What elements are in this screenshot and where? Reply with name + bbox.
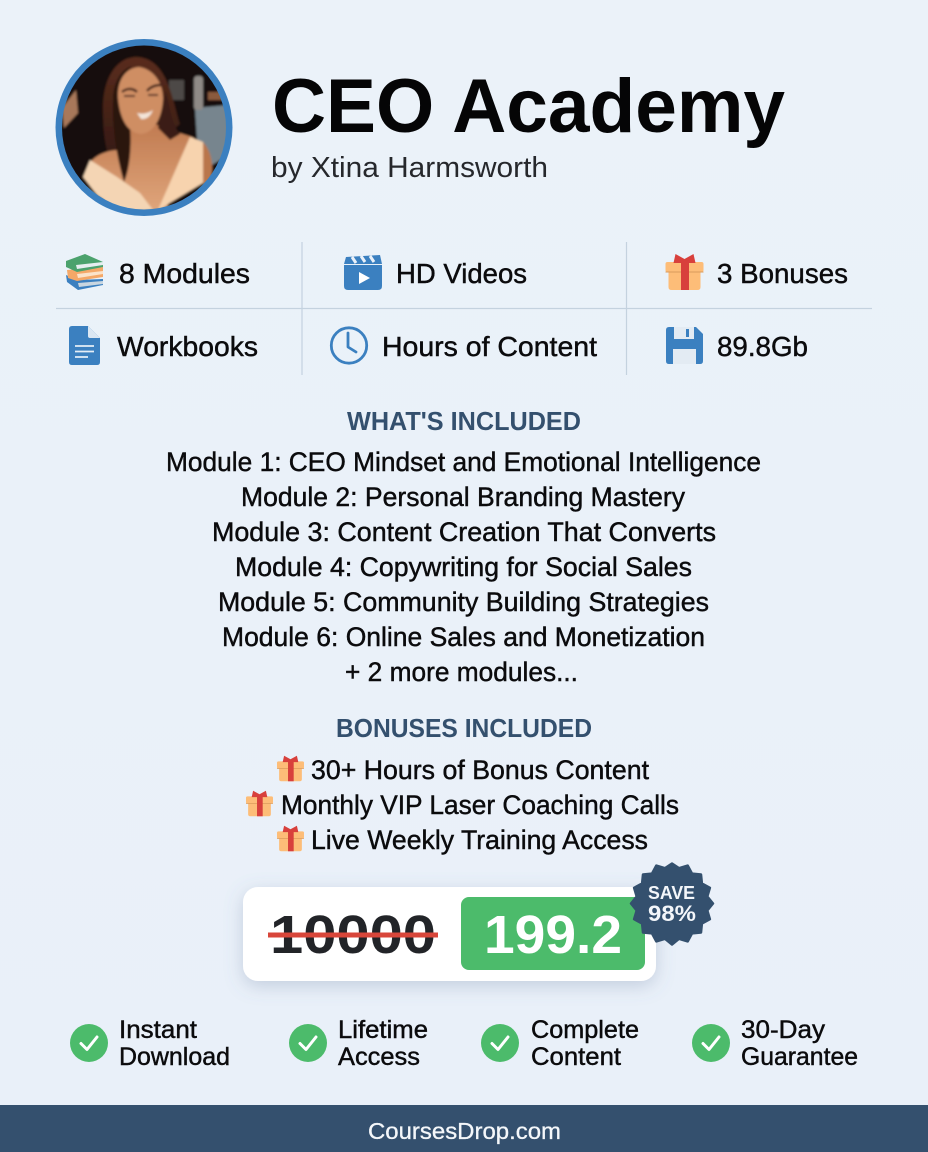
save badge <box>631 864 713 944</box>
module list: Module 2: Personal Branding Mastery <box>241 482 685 512</box>
icon: clock <box>331 328 367 363</box>
item: instant download <box>70 1016 230 1071</box>
label: HD videos: HD Videos <box>396 258 527 289</box>
save badge: SAVE <box>648 883 695 903</box>
item: lifetime access <box>289 1016 428 1071</box>
title: CEO Academy <box>272 64 785 149</box>
item: instant download: Download <box>119 1043 230 1071</box>
price card <box>243 864 713 981</box>
label: 8 modules: 8 Modules <box>119 258 250 289</box>
item: lifetime access: Access <box>338 1043 420 1071</box>
module list: Module 5: Community Building Strategies <box>218 587 709 617</box>
footer bar <box>0 1105 928 1152</box>
item: lifetime access: Lifetime <box>338 1016 428 1044</box>
module list: + 2 more modules... <box>345 657 578 687</box>
icon: video clapper <box>344 255 382 290</box>
old price: 10000 <box>270 905 436 965</box>
item: complete content: Complete <box>531 1016 639 1044</box>
bonus list: 30+ Hours of Bonus Content <box>311 755 649 785</box>
label: hours of content: Hours of Content <box>382 331 597 362</box>
module list: Module 1: CEO Mindset and Emotional Intelligence <box>166 447 761 477</box>
author line: by Xtina Harmsworth <box>271 152 548 184</box>
header: portrait <box>55 39 235 220</box>
icon: floppy disk <box>666 327 703 364</box>
bonus list: Monthly VIP Laser Coaching Calls <box>281 790 679 820</box>
bonus list: Live Weekly Training Access <box>311 825 648 855</box>
section: bonuses included <box>246 715 679 855</box>
bonus list <box>246 755 679 855</box>
guarantees row <box>70 1016 858 1071</box>
icon: gift <box>666 254 704 290</box>
item: 30-day guarantee <box>692 1016 858 1071</box>
module list: Module 4: Copywriting for Social Sales <box>235 552 692 582</box>
icon: books <box>66 254 103 290</box>
footer bar: CoursesDrop.com <box>368 1118 561 1144</box>
section: what's included <box>166 408 761 687</box>
feature grid <box>56 242 872 375</box>
label: storage size: 89.8Gb <box>717 331 808 362</box>
label: workbooks: Workbooks <box>117 331 258 362</box>
item: 30-day guarantee: 30-Day <box>741 1016 826 1044</box>
label: 3 bonuses: 3 Bonuses <box>717 258 848 289</box>
module list <box>166 447 761 687</box>
heading: what's included: WHAT'S INCLUDED <box>347 408 581 436</box>
new price: 199.2 <box>484 905 622 965</box>
module list: Module 6: Online Sales and Monetization <box>222 622 705 652</box>
module list: Module 3: Content Creation That Converts <box>212 517 716 547</box>
item: complete content <box>481 1016 639 1071</box>
item: complete content: Content <box>531 1043 621 1071</box>
save badge: 98% <box>648 901 696 926</box>
item: instant download: Instant <box>119 1016 197 1044</box>
item: 30-day guarantee: Guarantee <box>741 1043 858 1071</box>
new price <box>461 897 645 970</box>
icon: document <box>69 326 100 365</box>
heading: bonuses included: BONUSES INCLUDED <box>336 715 592 743</box>
